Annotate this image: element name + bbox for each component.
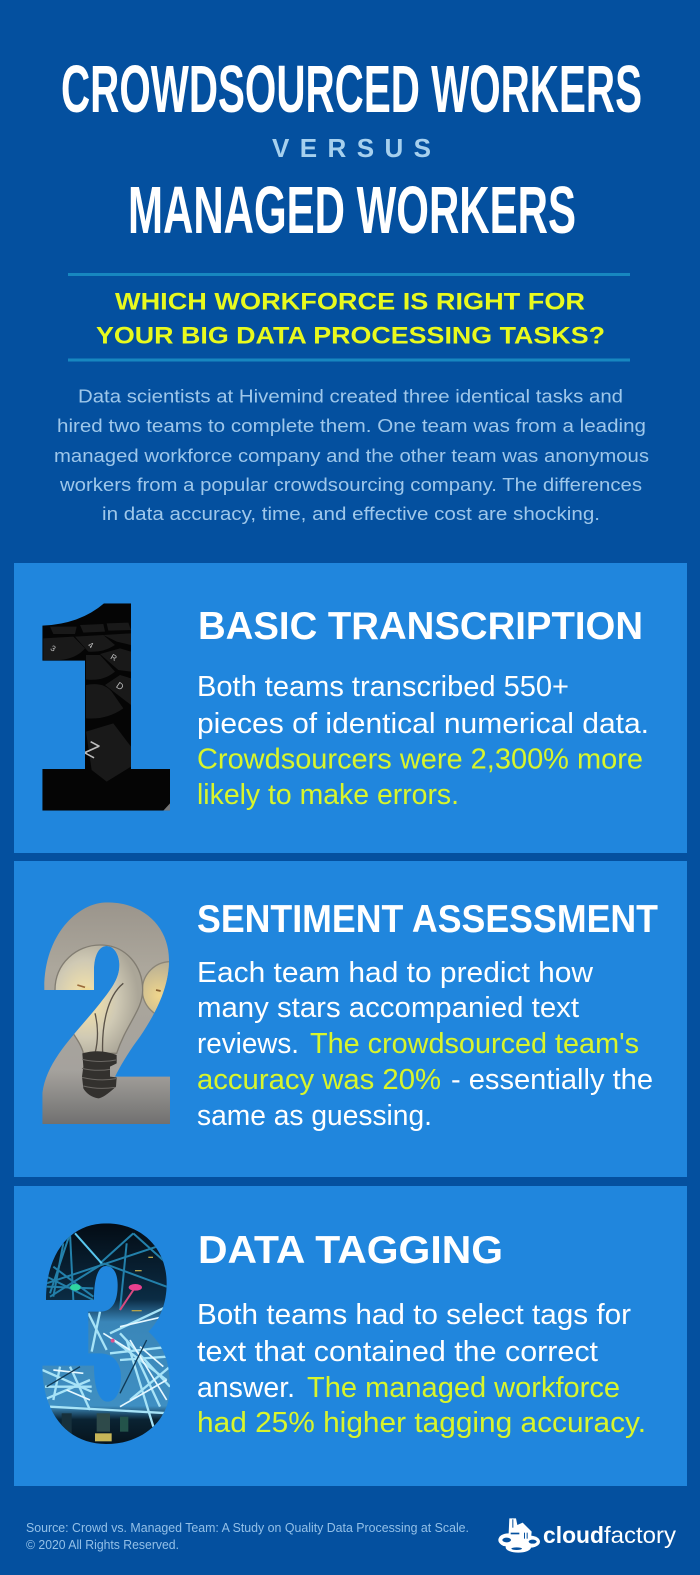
body text: text that contained the correct <box>197 1336 598 1368</box>
intro paragraph: Data scientists at Hivemind created three identical tasks and <box>78 386 623 406</box>
body text <box>197 1299 646 1439</box>
intro paragraph <box>54 386 649 524</box>
body text: pieces of identical numerical data. <box>197 708 649 740</box>
body text: same as guessing. <box>197 1100 432 1132</box>
body text <box>197 957 653 1132</box>
body text: Both teams transcribed 550+ <box>197 671 569 703</box>
panel 3: data tagging <box>14 1186 687 1486</box>
panel 2: sentiment assessment <box>14 861 687 1177</box>
body text: Each team had to predict how <box>197 957 594 989</box>
footer source note: © 2020 All Rights Reserved. <box>26 1538 179 1552</box>
heading: SENTIMENT ASSESSMENT <box>197 898 658 941</box>
body text: - essentially the <box>451 1064 653 1096</box>
body text <box>197 671 649 811</box>
intro paragraph: in data accuracy, time, and effective cost are shocking. <box>102 503 600 524</box>
subtitle band: YOUR BIG DATA PROCESSING TASKS? <box>96 322 605 350</box>
body text: Both teams had to select tags for <box>197 1299 631 1331</box>
icon: numeral 1 filled with keyboard photo: R <box>109 652 119 663</box>
intro paragraph: hired two teams to complete them. One team was from a leading <box>57 415 646 436</box>
footer source note <box>26 1521 469 1552</box>
subtitle band: WHICH WORKFORCE IS RIGHT FOR <box>115 288 585 316</box>
icon: cloud and factory <box>498 1518 540 1553</box>
body text: likely to make errors. <box>197 779 459 811</box>
wordmark: cloud <box>543 1522 604 1548</box>
body text: had 25% higher tagging accuracy. <box>197 1407 646 1439</box>
subtitle band <box>68 273 630 362</box>
body text: accuracy was 20% <box>197 1064 441 1096</box>
body text: many stars accompanied text <box>197 992 579 1024</box>
body text: answer. <box>197 1372 295 1404</box>
footer source note: Source: Crowd vs. Managed Team: A Study on Quality Data Processing at Scale. <box>26 1521 469 1535</box>
icon: numeral 3 filled with neon network photo <box>40 1220 173 1447</box>
heading: DATA TAGGING <box>198 1229 503 1272</box>
body text: The managed workforce <box>307 1372 620 1404</box>
icon: numeral 1 filled with keyboard photo: 3 <box>49 644 58 654</box>
panel 1: basic transcription <box>14 563 687 853</box>
body text: Crowdsourcers were 2,300% more <box>197 744 643 776</box>
intro paragraph: managed workforce company and the other team was anonymous <box>54 445 649 466</box>
body text: reviews. <box>197 1028 299 1060</box>
icon: numeral 1 filled with keyboard photo: Z <box>81 737 103 763</box>
intro paragraph: workers from a popular crowdsourcing company. The differences <box>59 474 642 495</box>
heading: BASIC TRANSCRIPTION <box>198 605 643 648</box>
versus label: VERSUS <box>272 133 431 163</box>
icon: numeral 1 filled with keyboard photo: 4 <box>87 640 95 651</box>
icon: numeral 2 filled with light bulb photo <box>42 902 170 1124</box>
logo: cloudfactory <box>498 1518 676 1553</box>
icon: numeral 1 filled with keyboard photo: D <box>114 680 126 692</box>
wordmark: factory <box>604 1522 676 1548</box>
icon: numeral 1 filled with keyboard photo <box>40 600 173 813</box>
body text: The crowdsourced team's <box>310 1028 639 1060</box>
